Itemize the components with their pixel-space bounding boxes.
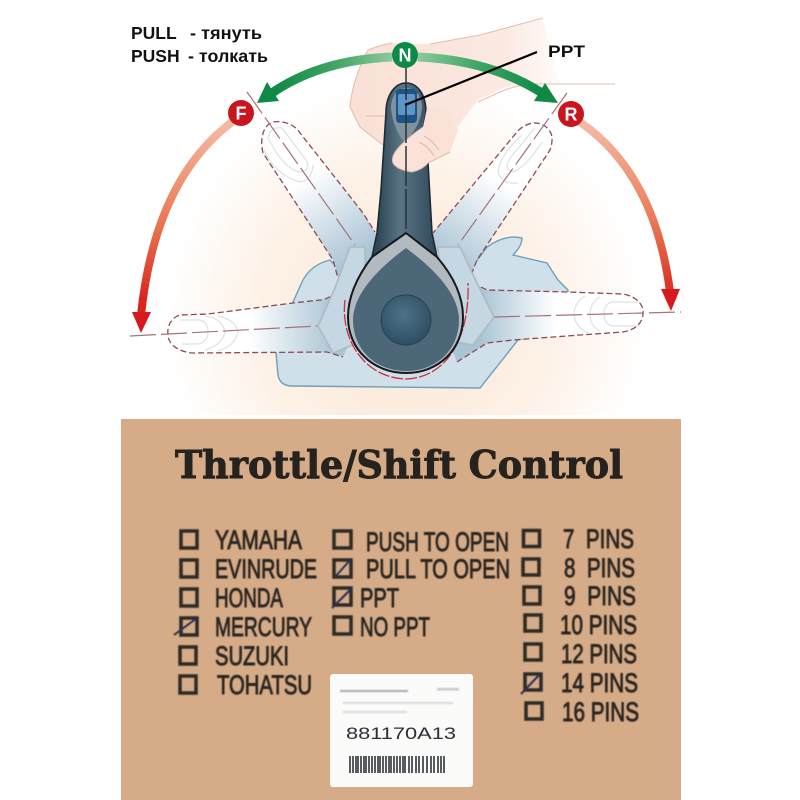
column: engine brands: YAMAHA bbox=[215, 525, 302, 555]
thumb contour bbox=[392, 127, 450, 172]
part number: 881170A13 bbox=[346, 725, 456, 743]
column: engine brands: TOHATSU bbox=[217, 670, 312, 700]
column: pin counts: 16 PINS bbox=[562, 697, 639, 727]
column: pin counts: 10 PINS bbox=[560, 610, 637, 640]
legend: pull and push: PUSH bbox=[131, 46, 180, 66]
column: pin counts bbox=[521, 524, 639, 727]
hand contour lines bbox=[350, 18, 615, 145]
badge R: R bbox=[564, 104, 578, 124]
column: options: PUSH TO OPEN bbox=[366, 527, 509, 557]
badge R bbox=[558, 101, 584, 127]
column: engine brands: MERCURY bbox=[215, 612, 312, 642]
hand holding the lever bbox=[350, 18, 560, 172]
column: engine brands bbox=[174, 525, 317, 700]
ghost lever: reverse horizontal bbox=[440, 283, 681, 362]
background glow bbox=[150, 80, 660, 415]
badge N bbox=[392, 42, 418, 68]
red arrow from R bbox=[580, 122, 680, 311]
panel: cardboard box label bbox=[121, 419, 681, 800]
legend: pull and push bbox=[131, 23, 268, 66]
column: engine brands: SUZUKI bbox=[215, 641, 289, 671]
badge F bbox=[228, 100, 254, 126]
PPT trim button bbox=[396, 89, 417, 123]
part number sticker bbox=[330, 674, 473, 787]
cardboard background bbox=[121, 419, 681, 800]
column: pin counts: 14 PINS bbox=[561, 668, 638, 698]
badge F: F bbox=[236, 104, 246, 124]
sticker small print bbox=[340, 688, 459, 713]
column: pin counts: 12 PINS bbox=[561, 639, 637, 669]
control console body bbox=[276, 237, 568, 388]
lever head highlight bbox=[391, 88, 422, 142]
red arrow from F bbox=[132, 122, 232, 333]
column: options: PULL TO OPEN bbox=[366, 554, 510, 584]
legend: pull and push: - толкать bbox=[188, 46, 268, 66]
PPT label: PPT bbox=[548, 42, 586, 61]
legend: pull and push: - тянуть bbox=[190, 23, 262, 43]
green arrow toward R bbox=[418, 57, 558, 103]
lever hub facets bbox=[318, 247, 494, 379]
column: pin counts: 7 PINS bbox=[563, 524, 634, 554]
lever centre line bbox=[405, 60, 407, 233]
column: options: NO PPT bbox=[360, 612, 430, 642]
thumb bbox=[392, 108, 458, 172]
box title: Throttle/Shift Control bbox=[175, 442, 623, 487]
column: pin counts: 9 PINS bbox=[564, 581, 636, 611]
legend: pull and push: PULL bbox=[131, 23, 177, 43]
lever teardrop body bbox=[348, 233, 463, 373]
ghost lever: forward horizontal bbox=[130, 292, 365, 357]
column: options bbox=[332, 527, 510, 642]
badge N: N bbox=[398, 46, 412, 66]
ghost lever: reverse diagonal bbox=[430, 93, 567, 283]
column: options: PPT bbox=[360, 583, 399, 613]
green arrow toward F bbox=[257, 57, 392, 103]
PPT pointer line bbox=[405, 52, 537, 105]
column: engine brands: HONDA bbox=[215, 583, 283, 613]
barcode bbox=[350, 756, 444, 773]
ghost lever: forward diagonal bbox=[247, 92, 380, 300]
column: engine brands: EVINRUDE bbox=[215, 554, 317, 584]
lever handle bbox=[372, 83, 437, 270]
column: pin counts: 8 PINS bbox=[564, 553, 635, 583]
panel: lever diagram bbox=[130, 18, 681, 415]
